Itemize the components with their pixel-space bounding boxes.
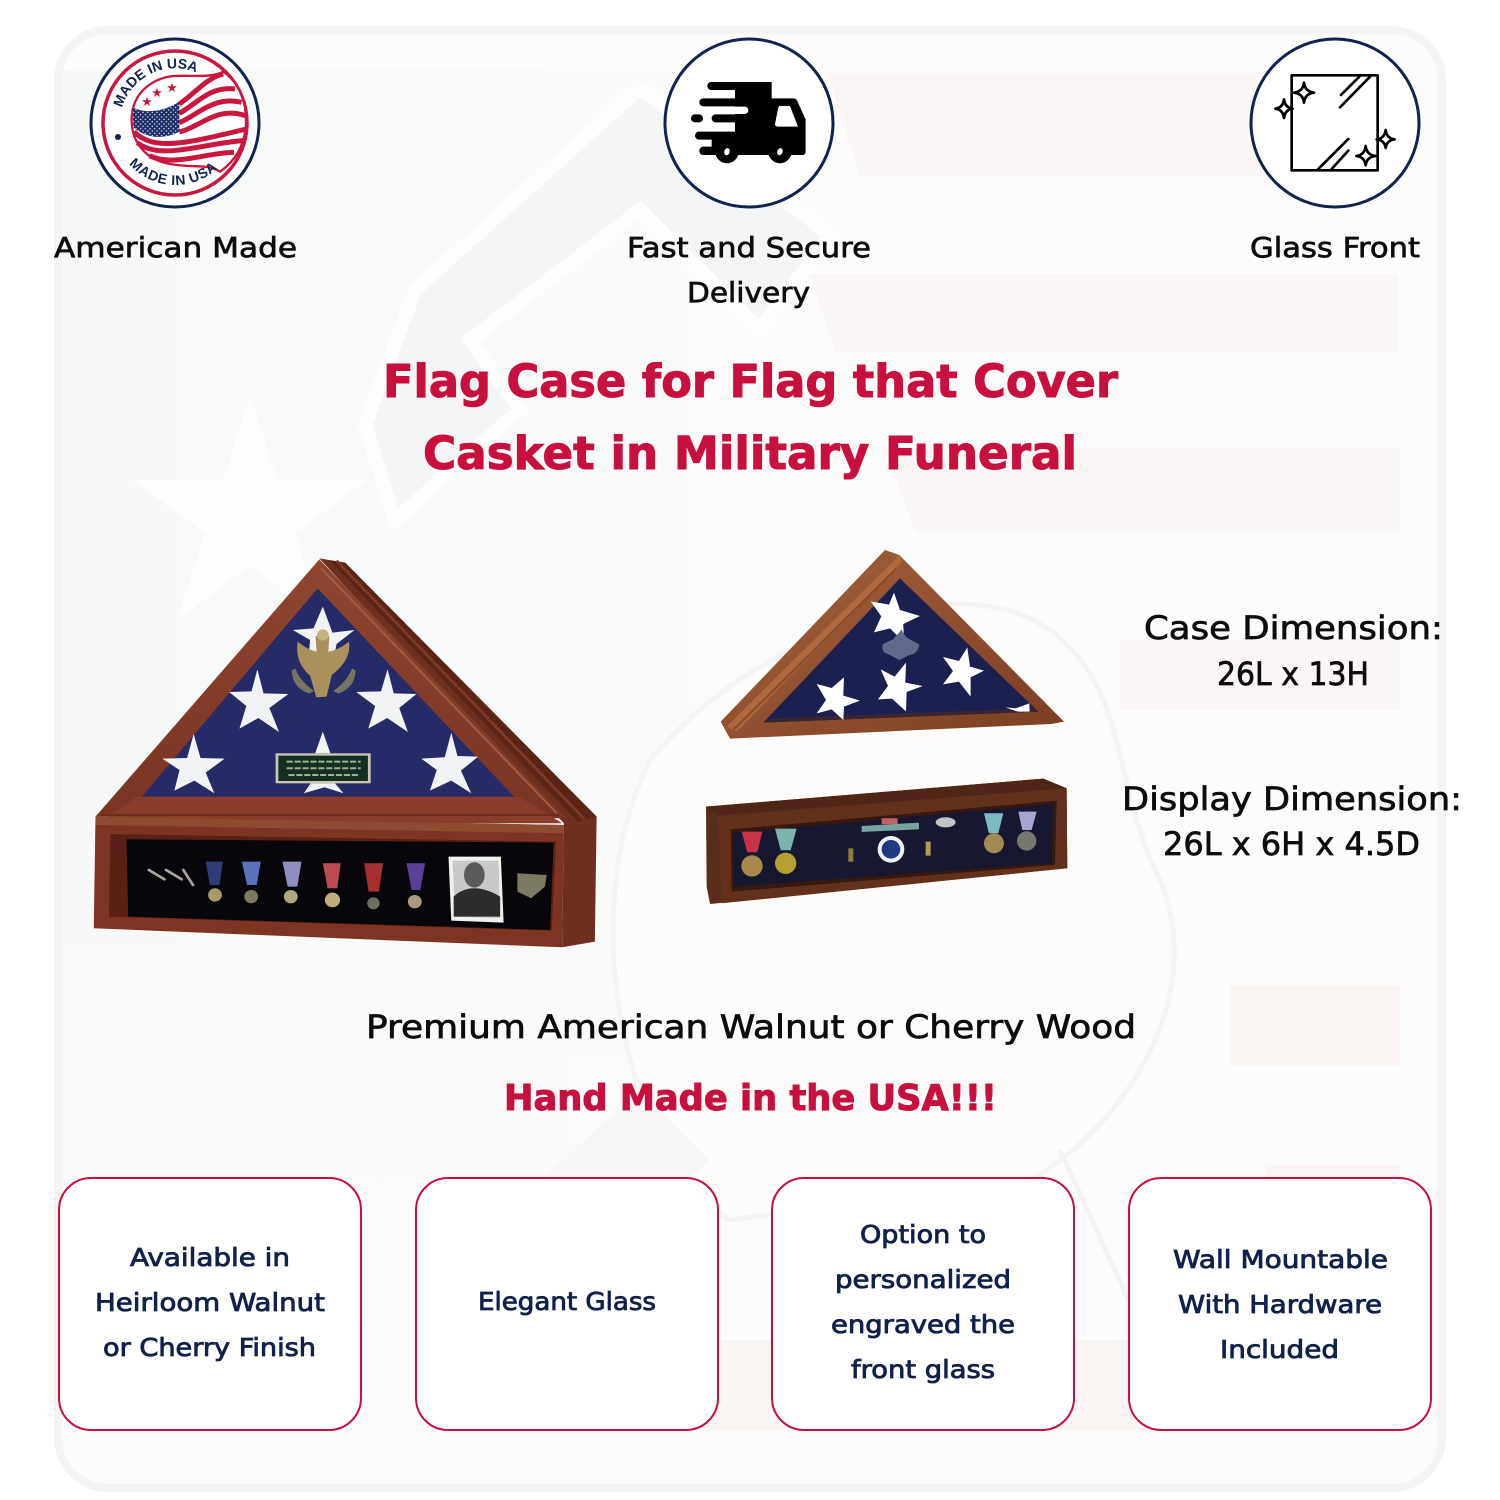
eagle emblem <box>292 629 356 697</box>
feature card: wall mount <box>1129 1178 1431 1430</box>
wood material line: Premium American Walnut or Cherry Wood <box>366 1008 1136 1046</box>
display dimension: 26L x 6H x 4.5D <box>1163 825 1420 863</box>
portrait photo <box>449 857 504 923</box>
icon: made in USA badge: ★ <box>166 81 178 96</box>
product photo: combined flag and medal case <box>94 558 597 947</box>
feature card: engraving: engraved the <box>831 1310 1015 1339</box>
title: Casket in Military Funeral <box>423 427 1077 480</box>
product photo: flag case <box>721 550 1064 739</box>
feature card: finish: Heirloom Walnut <box>95 1288 325 1317</box>
feature card: glass <box>416 1178 718 1430</box>
feature card: wall mount: With Hardware <box>1178 1290 1382 1319</box>
stars on folded flag <box>162 607 478 793</box>
label: Glass Front: Glass Front <box>1250 231 1420 264</box>
case dimension: 26L x 13H <box>1217 655 1369 693</box>
feature card: engraving <box>772 1178 1074 1430</box>
icon: made in USA badge: MADE IN USA <box>130 158 218 186</box>
icon: glass pane <box>1251 39 1419 207</box>
product photo: medal display case <box>706 779 1067 904</box>
medals row <box>149 862 425 909</box>
case dimension: Case Dimension: <box>1144 609 1443 647</box>
medals <box>741 812 1037 877</box>
feature card: wall mount: Included <box>1220 1335 1339 1364</box>
feature card: engraving: front glass <box>851 1355 995 1384</box>
display dimension: Display Dimension: <box>1122 780 1462 818</box>
label: American Made: American Made <box>54 231 297 264</box>
insignia <box>517 873 547 898</box>
feature card: finish: Available in <box>130 1243 290 1272</box>
feature card: finish <box>59 1178 361 1430</box>
title <box>383 355 1119 480</box>
feature card: engraving: Option to <box>860 1220 986 1249</box>
stars <box>817 593 1030 720</box>
eagle emblem <box>882 629 919 660</box>
feature card: engraving: personalized <box>835 1265 1011 1294</box>
label: Fast and Secure Delivery: Fast and Secure <box>627 231 871 264</box>
hand made line: Hand Made in the USA!!! <box>504 1078 997 1119</box>
icon: made in USA badge <box>90 38 260 208</box>
display dimension <box>1122 780 1462 863</box>
icon: made in USA badge: MADE IN USA <box>113 58 196 107</box>
icon: fast delivery truck <box>665 39 833 207</box>
icon: made in USA badge: ★ <box>141 95 153 110</box>
feature card: finish: or Cherry Finish <box>103 1333 316 1362</box>
engraved plaque <box>276 753 371 783</box>
feature card: wall mount: Wall Mountable <box>1173 1245 1388 1274</box>
case dimension <box>1144 609 1443 693</box>
label: Fast and Secure Delivery: Delivery <box>687 276 810 309</box>
label: Fast and Secure Delivery <box>627 231 871 309</box>
icon: made in USA badge: ★ <box>151 86 163 101</box>
feature card: glass: Elegant Glass <box>478 1287 656 1316</box>
title: Flag Case for Flag that Cover <box>383 355 1119 408</box>
